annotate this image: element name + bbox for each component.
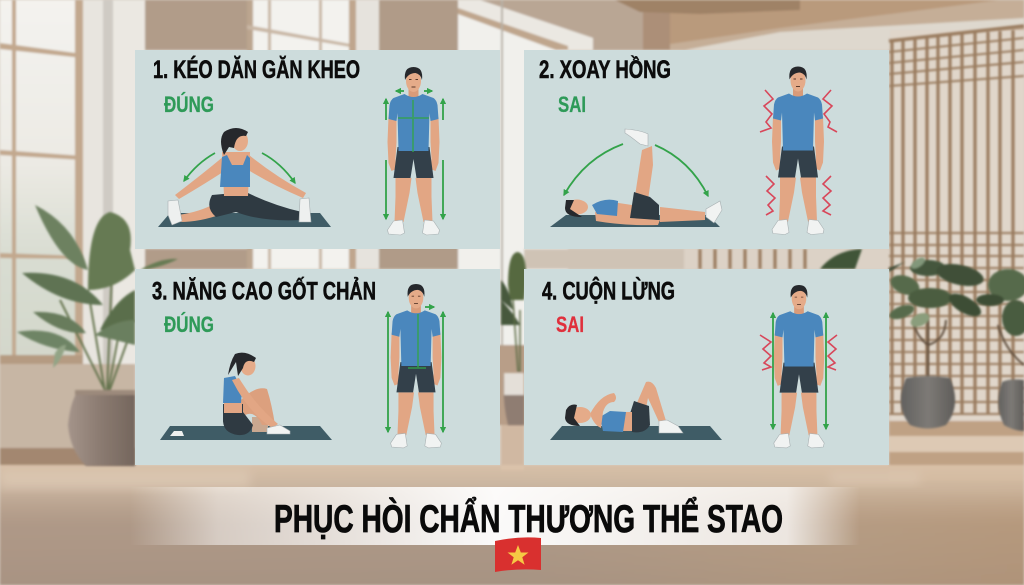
label: correct: ĐÚNG — [164, 92, 214, 117]
panel 4: crunch — [524, 269, 889, 465]
figure: standing man front view — [388, 67, 440, 235]
title band — [130, 487, 860, 545]
label: correct: ĐÚNG — [164, 312, 214, 337]
icons: red pain zigzags — [760, 335, 837, 370]
illustration: woman seated holding ankle — [160, 353, 332, 440]
main title: PHỤC HÒI CHẨN THƯƠNG THỂ STAO — [274, 496, 783, 541]
heading: exercise 4: 4. CUỘN LỪNG — [542, 276, 675, 306]
figure: standing man front view — [772, 66, 824, 234]
panel 1: hamstring stretch — [135, 50, 500, 249]
arrows: body alignment — [386, 91, 443, 219]
icons: red pain zigzags — [760, 90, 837, 215]
icon: Vietnam flag — [495, 537, 541, 572]
arrows: body alignment — [773, 313, 826, 429]
panel 2: leg raise — [524, 50, 889, 249]
illustration: woman lying with raised leg — [550, 129, 722, 227]
arrows: stretch direction — [184, 153, 295, 183]
arrows: body alignment — [388, 307, 443, 432]
label: wrong: SAI — [556, 312, 584, 337]
illustration: woman lying with bent knees — [550, 382, 722, 440]
figure: standing man front view — [391, 284, 441, 448]
plant: right potted trees — [820, 249, 1024, 431]
heading: exercise 2: 2. XOAY HỒNG — [539, 54, 671, 84]
lattice screen — [700, 26, 1024, 414]
heading: exercise 3: 3. NĂNG CAO GỐT CHẢN — [152, 276, 376, 306]
arrows: leg swing — [564, 144, 708, 196]
plant: left potted plant — [17, 205, 178, 466]
plant: centre potted plant — [501, 252, 526, 425]
panel 3: seated knee lift — [135, 269, 500, 465]
figure: standing man front view — [774, 285, 824, 448]
label: wrong: SAI — [558, 92, 586, 117]
heading: exercise 1: 1. KÉO DĂN GĂN KHEO — [153, 55, 360, 84]
illustration: woman seated side stretch — [158, 128, 331, 227]
